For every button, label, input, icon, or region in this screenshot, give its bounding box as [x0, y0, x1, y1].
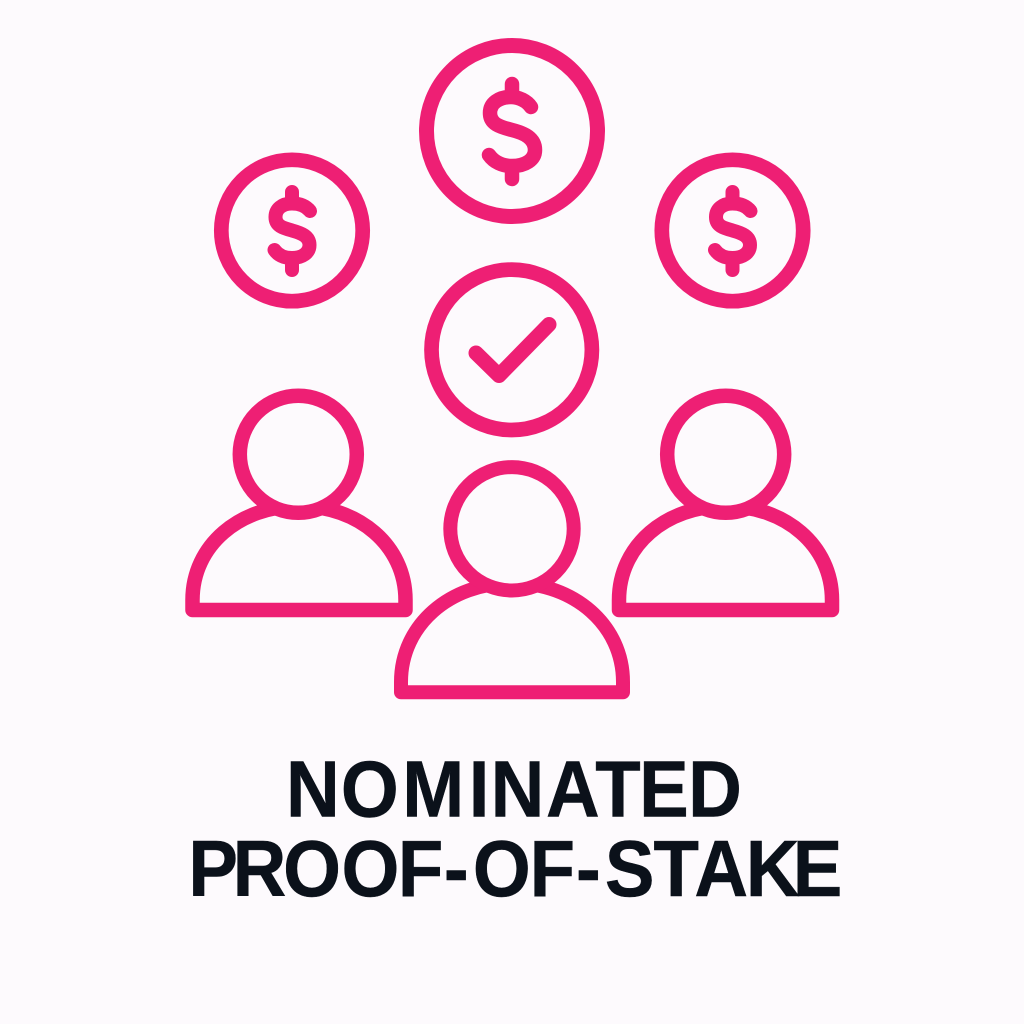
icon: check mark badge, centre	[432, 270, 592, 430]
icon: large dollar coin, top centre	[426, 46, 598, 216]
icon: person, right	[619, 396, 832, 610]
icon: person, front centre	[401, 467, 623, 692]
title	[188, 745, 842, 914]
title line 1: NOMINATED	[286, 745, 742, 834]
title line 2: PROOF-OF-STAKE	[188, 825, 842, 914]
icon: small dollar coin, left	[221, 160, 363, 301]
icon: person, left	[192, 396, 406, 610]
icon: small dollar coin, right	[662, 160, 803, 301]
